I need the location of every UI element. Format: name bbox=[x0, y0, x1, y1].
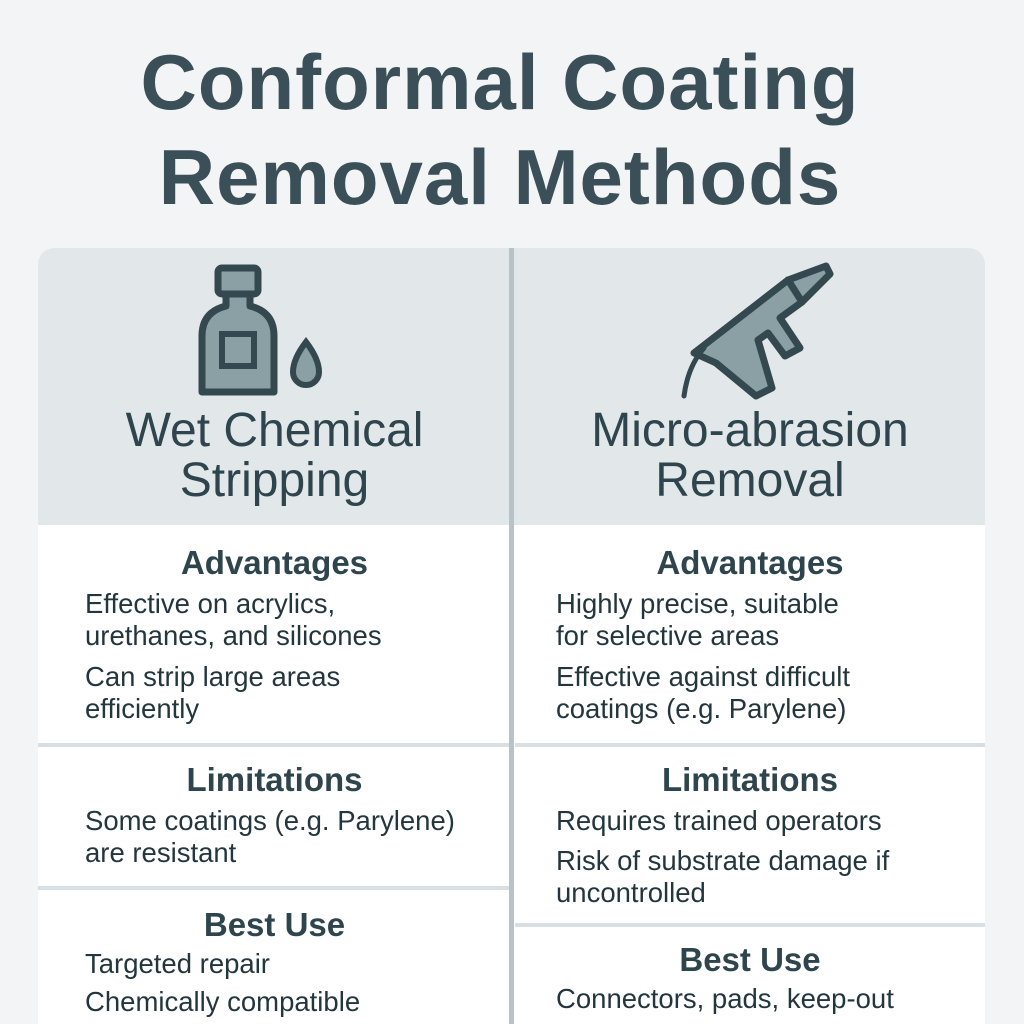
title: Conformal Coating bbox=[141, 38, 859, 126]
left best use: Targeted repair bbox=[85, 948, 270, 979]
right best use: Best Use bbox=[679, 941, 821, 978]
left advantages: urethanes, and silicones bbox=[85, 620, 382, 651]
left advantages: Advantages bbox=[181, 544, 368, 581]
heading: wet chemical stripping: Stripping bbox=[180, 454, 369, 507]
right limitations: Requires trained operators bbox=[556, 805, 882, 836]
left limitations: Limitations bbox=[186, 761, 362, 798]
left limitations: are resistant bbox=[85, 837, 236, 868]
right advantages: Highly precise, suitable bbox=[556, 588, 839, 619]
icon: micro-abrasion gun bbox=[682, 262, 834, 400]
right limitations: Limitations bbox=[662, 761, 838, 798]
left best use bbox=[85, 906, 360, 1017]
title: Removal Methods bbox=[159, 133, 841, 221]
heading: micro-abrasion removal: Removal bbox=[655, 454, 845, 507]
right advantages: Effective against difficult bbox=[556, 661, 850, 692]
right limitations bbox=[556, 761, 890, 908]
right limitations: Risk of substrate damage if bbox=[556, 845, 889, 876]
icon: bottle with drop bbox=[198, 264, 322, 396]
column divider bbox=[509, 248, 514, 1024]
right limitations: uncontrolled bbox=[556, 877, 706, 908]
comparison card bbox=[38, 248, 985, 1024]
left limitations: Some coatings (e.g. Parylene) bbox=[85, 805, 455, 836]
right best use bbox=[556, 941, 894, 1014]
header band bbox=[38, 248, 985, 525]
left best use: Best Use bbox=[204, 906, 345, 943]
right advantages: coatings (e.g. Parylene) bbox=[556, 693, 846, 724]
left advantages: efficiently bbox=[85, 693, 199, 724]
right advantages: for selective areas bbox=[556, 620, 779, 651]
heading: wet chemical stripping: Wet Chemical bbox=[126, 404, 423, 457]
left best use: Chemically compatible bbox=[85, 986, 360, 1017]
left advantages: Can strip large areas bbox=[85, 661, 340, 692]
heading: micro-abrasion removal bbox=[591, 404, 909, 507]
heading: wet chemical stripping bbox=[126, 404, 423, 507]
right advantages bbox=[556, 544, 850, 724]
heading: micro-abrasion removal: Micro-abrasion bbox=[591, 404, 909, 457]
title bbox=[141, 38, 859, 221]
left advantages: Effective on acrylics, bbox=[85, 588, 335, 619]
left limitations bbox=[85, 761, 455, 868]
left advantages bbox=[85, 544, 382, 724]
right best use: Connectors, pads, keep-out bbox=[556, 983, 894, 1014]
right advantages: Advantages bbox=[656, 544, 844, 581]
